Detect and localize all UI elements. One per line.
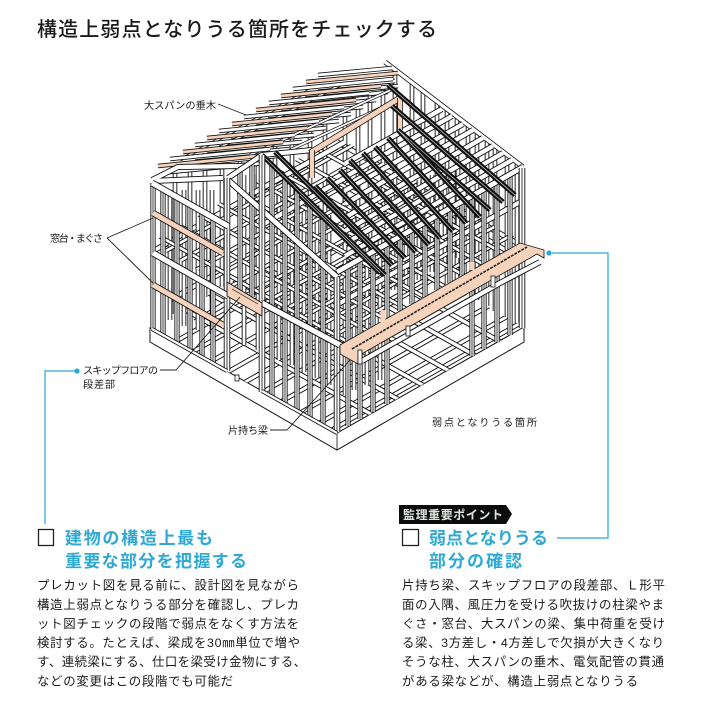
heading: 建物の構造上最も (65, 529, 213, 548)
highlighted skip floor beam (227, 282, 262, 316)
body text: 構造上弱点となりうる部分を確認し、プレカ (37, 597, 299, 612)
label: skip floor step: 段差部 (83, 378, 115, 391)
connector: right blue line (546, 250, 608, 538)
body text: プレカット図を見る前に、設計図を見ながら (37, 578, 299, 592)
corner posts (227, 155, 522, 432)
cantilever support beam (358, 262, 540, 364)
checkbox (402, 530, 418, 546)
foundation (150, 327, 524, 450)
interior wall studs (170, 165, 458, 395)
heading: 弱点となりうる (429, 529, 548, 548)
body text: などの変更はこの段階でも可能だ (37, 674, 233, 688)
back wall studs (155, 62, 524, 323)
panel: left column (37, 529, 306, 688)
heading (65, 529, 247, 571)
heading: 部分の確認 (429, 552, 522, 571)
label: window sill and lintel: 窓台・まぐさ (50, 232, 103, 245)
label: skip floor step (83, 297, 240, 391)
upper wall studs (152, 150, 523, 426)
body text: がある梁などが、構造上弱点となりうる (402, 674, 638, 688)
badge (399, 505, 512, 524)
connector: left blue line (45, 368, 80, 524)
body text: 検討する。たとえば、梁成を30㎜単位で増や (37, 635, 300, 650)
body text: ぐさ・窓台、大スパンの梁、集中荷重を受け (402, 616, 665, 631)
body text: ット図チェックの段階で弱点をなくす方法を (37, 616, 299, 631)
title: 構造上弱点となりうる箇所をチェックする (37, 18, 437, 41)
label: skip floor step: スキップフロアの (83, 365, 158, 377)
heading (429, 529, 548, 571)
highlighted lintels and sills (153, 213, 223, 325)
second floor joist lattice (158, 144, 514, 342)
label: weak points legend: 弱点となりうる箇所 (432, 416, 537, 429)
body text: る梁、3方差し・4方差しで欠損が大きくなり (402, 635, 664, 650)
label: window sill and lintel (50, 218, 153, 283)
peach truss (310, 98, 400, 178)
panel: right column (399, 505, 665, 688)
illustration: timber frame house (150, 60, 544, 451)
body text: そうな柱、大スパンの垂木、電気配管の貫通 (402, 654, 665, 669)
highlighted cantilever beam (340, 243, 544, 364)
body text (402, 578, 665, 688)
label: cantilever beam: 片持ち梁 (228, 424, 268, 437)
label: large span rafters: 大スパンの垂木 (144, 99, 216, 112)
label: cantilever beam (228, 360, 350, 437)
body text: す、連続梁にする、仕口を梁受け金物にする、 (37, 654, 306, 669)
heading: 重要な部分を把握する (65, 552, 247, 571)
left wall beams (152, 183, 340, 433)
label: large span rafters (144, 99, 246, 115)
roof rafters: large span (158, 68, 398, 172)
checkbox (38, 530, 54, 546)
body text: 片持ち梁、スキップフロアの段差部、Ｌ形平 (402, 578, 665, 592)
dark rafters (262, 85, 515, 275)
interior upper beams (250, 109, 512, 256)
badge: 監理重要ポイント (403, 507, 503, 522)
body text: 面の入隅、風圧力を受ける吹抜けの柱梁やま (402, 597, 664, 612)
floor joist lattice (180, 240, 519, 428)
body text (37, 578, 306, 688)
